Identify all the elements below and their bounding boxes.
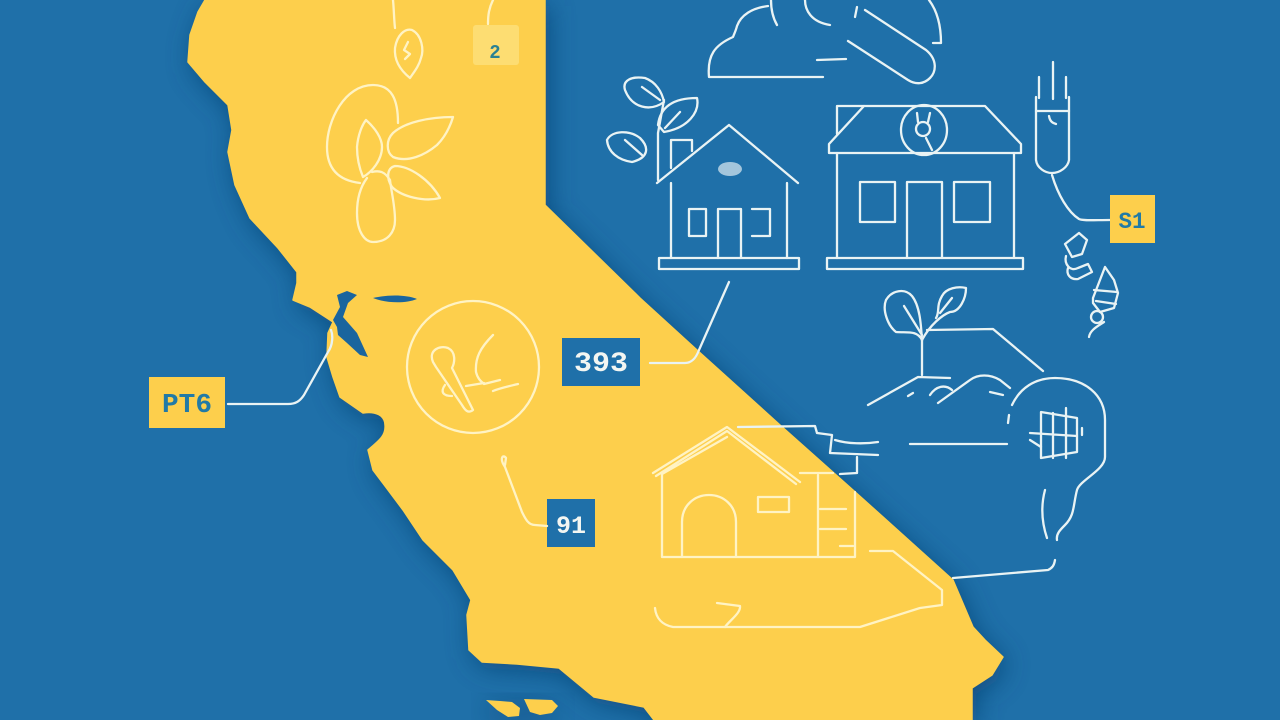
light bulb icon [1008, 378, 1105, 540]
connector to label 2 [488, 0, 493, 24]
bottom house stairs [738, 426, 878, 474]
small squiggle [717, 603, 740, 627]
label: PT6 [149, 377, 225, 428]
island shadows [486, 698, 560, 720]
cloud icon [709, 0, 941, 83]
label: S1 [1110, 195, 1155, 243]
connector to 91 [502, 456, 547, 526]
label: 393 [562, 338, 640, 386]
San Francisco bay [333, 291, 368, 357]
flower icon [327, 85, 453, 242]
inland water [373, 296, 417, 302]
circle pin icon [407, 301, 539, 433]
label: S1: S1 [1118, 209, 1146, 235]
label: 91 [547, 499, 595, 547]
California map [188, 0, 1003, 720]
connector from 393 [650, 282, 729, 363]
map shadow [192, 6, 1007, 720]
squiggle icon [1065, 233, 1118, 337]
connector from PT6 [228, 330, 332, 404]
large house icon [827, 105, 1023, 269]
label: 2 [473, 25, 519, 65]
plug icon [1036, 62, 1069, 173]
label: 2: 2 [489, 42, 501, 64]
plug cable [1052, 175, 1110, 220]
lower outline [655, 551, 942, 627]
label: 91: 91 [556, 512, 586, 541]
label: PT6: PT6 [162, 391, 212, 421]
top teardrop icon [393, 0, 422, 78]
sapling icon [868, 287, 1043, 444]
label: 393: 393 [574, 349, 628, 380]
connector from bulb [953, 560, 1055, 578]
small house icon with plant [607, 78, 799, 269]
channel islands [486, 699, 558, 717]
bottom house icon [653, 427, 855, 557]
